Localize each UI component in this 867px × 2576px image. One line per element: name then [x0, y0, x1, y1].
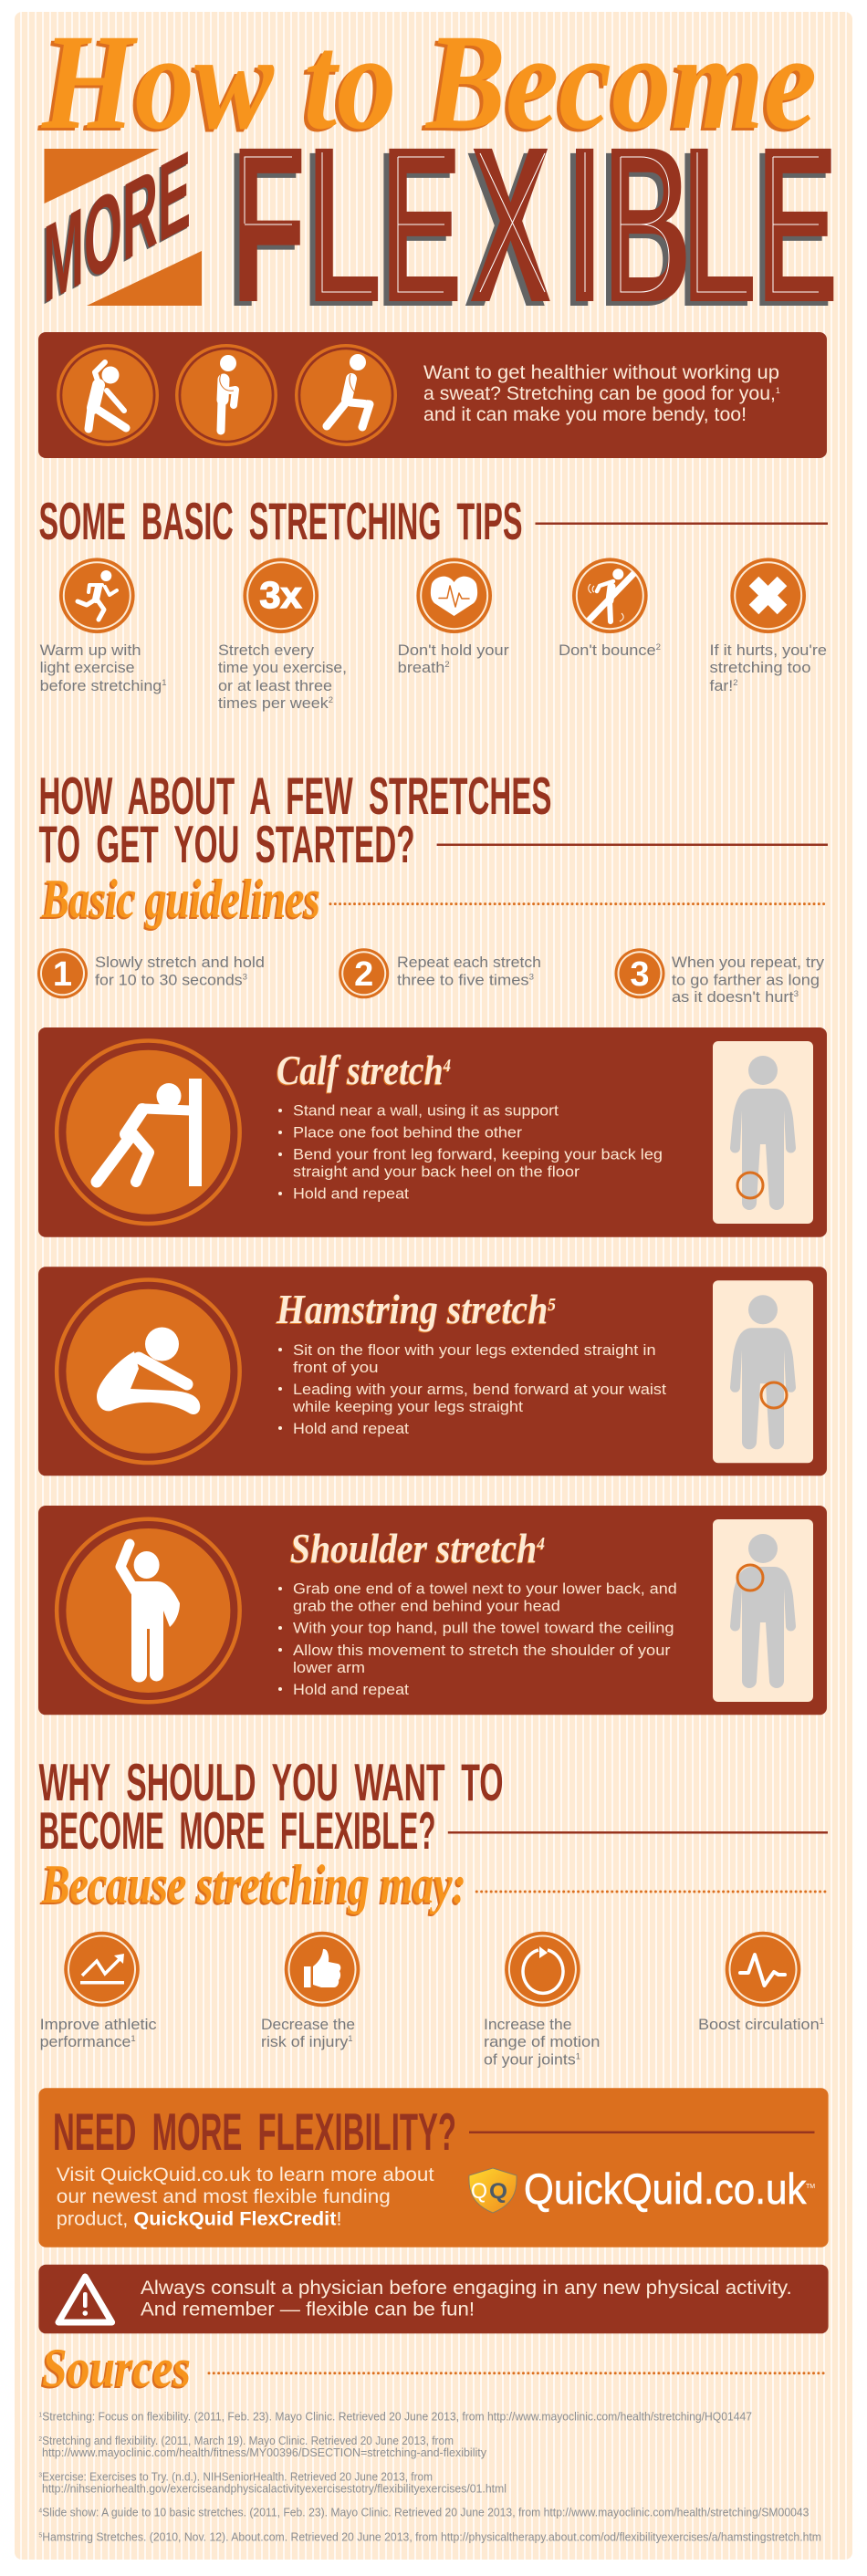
shoulder stretch steps: lower arm: [293, 1659, 365, 1676]
guideline 2: 2: [354, 955, 373, 994]
source list: [38, 2410, 821, 2543]
title: FLEXIBLE: FLEXIBLE: [232, 99, 839, 349]
calf stretch steps: straight and your back heel on the floor: [293, 1163, 580, 1181]
hamstring stretch steps: Sit on the floor with your legs extended straight in: [293, 1341, 656, 1359]
calf stretch steps: Hold and repeat: [293, 1184, 409, 1202]
source list: Stretching: Focus on flexibility. (2011, Feb. 23). Mayo Clinic. Retrieved 20 June 2013, from http://www.mayoclinic.com/health/stretching/HQ01447: [42, 2410, 752, 2423]
shoulder stretch steps: Allow this movement to stretch the shoulder of your: [293, 1642, 671, 1659]
tip: stretch three times: Stretch every: [218, 641, 315, 659]
call to action text: Visit QuickQuid.co.uk to learn more about: [57, 2164, 434, 2185]
source list: Slide show: A guide to 10 basic stretches. (2011, Feb. 23). Mayo Clinic. Retrieved 20 June 2013, from http://www.mayoclinic.com/health/stretching/SM00043: [42, 2507, 809, 2519]
tip: if it hurts: [710, 558, 827, 694]
icon: side bend stretch: [57, 344, 159, 446]
source list: http://www.mayoclinic.com/health/fitness/MY00396/DSECTION=stretching-and-flexibility: [42, 2446, 487, 2459]
benefit: range of motion: 1: [576, 2051, 580, 2060]
tip: breathing: [398, 558, 509, 676]
tip: stretch three times: time you exercise,: [218, 659, 347, 676]
shoulder stretch steps: [278, 1580, 677, 1698]
benefit: decrease injury: [261, 1932, 360, 2050]
benefit: boost circulation: 1: [820, 2017, 824, 2026]
tip: stretch three times: or at least three: [218, 677, 332, 694]
guideline 1: 1: [53, 955, 72, 994]
tip: stretch three times: 3x: [259, 574, 302, 616]
shoulder stretch title: Shoulder stretch: [290, 1525, 576, 1571]
shoulder stretch steps: grab the other end behind your head: [293, 1598, 560, 1615]
guideline 2: Repeat each stretch: [397, 954, 541, 971]
body diagram: hamstring highlighted: [713, 1280, 813, 1463]
title badge: MORE: [43, 127, 202, 328]
hamstring stretch steps: Leading with your arms, bend forward at your waist: [293, 1381, 666, 1398]
panel: need more flexibility call to action: [38, 2088, 829, 2247]
tip: don't bounce: [559, 558, 661, 659]
tip: if it hurts: If it hurts, you're: [710, 641, 827, 659]
call to action heading: NEED MORE FLEXIBILITY?: [53, 2103, 456, 2162]
benefit: athletic performance: [40, 1932, 157, 2050]
warning text: Always consult a physician before engaging in any new physical activity.: [141, 2278, 792, 2299]
heading: why should you want to become more flexible: [38, 1754, 828, 1861]
tip: if it hurts: 2: [733, 678, 737, 687]
source list: 4: [38, 2508, 42, 2515]
hamstring stretch steps: while keeping your legs straight: [292, 1398, 523, 1415]
shoulder stretch steps: Hold and repeat: [293, 1681, 409, 1698]
source list: Exercise: Exercises to Try. (n.d.). NIHSeniorHealth. Retrieved 20 June 2013, from: [42, 2471, 433, 2484]
tip: if it hurts: stretching too: [710, 659, 810, 676]
icon: warning triangle: [58, 2277, 112, 2322]
tip: warm up: before stretching: [40, 677, 155, 694]
tip: if it hurts: far!: [710, 677, 732, 694]
guideline 3: [615, 948, 825, 1006]
tip: warm up: 1: [162, 678, 167, 687]
logo: QuickQuid.co.uk: QuickQuid.co.uk: [524, 2164, 807, 2213]
benefit: range of motion: Increase the: [484, 2016, 571, 2033]
hamstring stretch steps: Hold and repeat: [293, 1420, 409, 1437]
body diagram: shoulder highlighted: [713, 1519, 813, 1702]
panel: calf stretch: [38, 1027, 827, 1237]
guideline 3: When you repeat, try: [672, 954, 825, 971]
heading: how about a few stretches: [38, 767, 828, 874]
icon: shoulder stretch figure: [55, 1517, 242, 1705]
panel: warning: [38, 2265, 829, 2333]
hamstring stretch title: 5: [548, 1295, 556, 1315]
icon: calf stretch figure: [55, 1038, 242, 1225]
shoulder stretch steps: Grab one end of a towel next to your lower back, and: [293, 1580, 677, 1598]
call to action text: our newest and most flexible funding: [57, 2186, 391, 2207]
heading: how about a few stretches: TO GET YOU STARTED?: [38, 816, 414, 874]
benefit: boost circulation: [698, 1932, 824, 2033]
benefit: athletic performance: performance: [40, 2033, 127, 2050]
tip: don't bounce: Don't bounce: [559, 641, 650, 659]
benefit: range of motion: of your joints: [484, 2050, 571, 2068]
panel: shoulder stretch: [38, 1506, 827, 1715]
subheading: because stretching may: Because stretching may:: [41, 1854, 466, 1914]
benefit: athletic performance: Improve athletic: [40, 2016, 157, 2033]
hamstring stretch steps: front of you: [293, 1359, 378, 1376]
tip: stretch three times: times per week: [218, 694, 322, 712]
guideline 3: to go farther as long: [672, 971, 820, 988]
warning text: And remember — flexible can be fun!: [141, 2299, 475, 2320]
source list: 2: [38, 2436, 42, 2443]
source list: Hamstring Stretches. (2010, Nov. 12). About.com. Retrieved 20 June 2013, from http://physicaltherapy.about.com/od/flexibilityexercises/a/hamstingstretch.htm: [42, 2530, 821, 2543]
logo: QuickQuid.co.uk: Q: [471, 2179, 487, 2204]
logo: QuickQuid.co.uk: TM: [806, 2184, 815, 2190]
tip: breathing: Don't hold your: [398, 641, 509, 659]
guideline 2: three to five times: [397, 971, 519, 988]
calf stretch steps: Bend your front leg forward, keeping your back leg: [293, 1146, 663, 1163]
icon: lunge stretch: [295, 344, 397, 446]
subheading: basic guidelines: Basic guidelines: [41, 869, 320, 929]
guideline 1: [37, 948, 265, 998]
icon: quad stretch: [175, 344, 277, 446]
intro text: Want to get healthier without working up: [423, 362, 779, 383]
hamstring stretch title: Hamstring stretch: [277, 1286, 590, 1332]
hamstring stretch steps: [278, 1341, 666, 1437]
intro text: and it can make you more bendy, too!: [423, 404, 747, 425]
tip: warm up: [40, 558, 167, 694]
benefit: range of motion: [484, 1932, 600, 2068]
benefit: decrease injury: risk of injury: [261, 2033, 344, 2050]
guideline 1: Slowly stretch and hold: [95, 954, 265, 971]
calf stretch steps: Stand near a wall, using it as support: [293, 1102, 559, 1120]
source list: 3: [38, 2473, 42, 2479]
calf stretch title: Calf stretch: [277, 1047, 478, 1093]
benefit: range of motion: range of motion: [484, 2033, 600, 2050]
tip: stretch three times: [218, 558, 347, 712]
benefit: boost circulation: Boost circulation: [698, 2016, 812, 2033]
subheading: sources: Sources: [42, 2338, 191, 2398]
benefit: athletic performance: 1: [131, 2034, 136, 2043]
heading: why should you want to become more flexible: WHY SHOULD YOU WANT TO: [38, 1754, 504, 1812]
calf stretch title: 4: [443, 1056, 451, 1076]
calf stretch steps: Place one foot behind the other: [293, 1124, 522, 1142]
intro text: a sweat? Stretching can be good for you,: [423, 383, 772, 404]
intro text: [423, 362, 780, 425]
tip: breathing: breath: [398, 659, 442, 676]
guideline 3: 3: [630, 955, 650, 994]
call to action text: [57, 2164, 434, 2229]
text: MORE: [43, 127, 191, 328]
guideline 2: 3: [529, 972, 534, 981]
call to action text: product, QuickQuid FlexCredit !: [57, 2208, 342, 2229]
guideline 2: [339, 948, 541, 998]
guideline 1: for 10 to 30 seconds: [95, 971, 235, 988]
source list: 1: [38, 2412, 42, 2418]
panel: hamstring stretch: [38, 1267, 827, 1476]
benefit: decrease injury: 1: [348, 2034, 353, 2043]
guideline 3: as it doesn't hurt: [672, 988, 785, 1006]
icon: hamstring stretch figure: [55, 1278, 242, 1465]
source list: Stretching and flexibility. (2011, March 19). Mayo Clinic. Retrieved 20 June 2013, from: [42, 2435, 454, 2447]
tip: don't bounce: 2: [656, 642, 661, 652]
source list: http://nihseniorhealth.gov/exerciseandphysicalactivityexercisestotry/flexibilityexercises/01.html: [42, 2483, 507, 2496]
tip: warm up: light exercise: [40, 659, 135, 676]
benefit: decrease injury: Decrease the: [261, 2016, 355, 2033]
calf stretch steps: [278, 1102, 663, 1202]
guideline 1: 3: [243, 972, 247, 981]
shoulder stretch title: 4: [537, 1534, 545, 1554]
source list: 5: [38, 2532, 42, 2539]
tip: breathing: 2: [444, 660, 450, 669]
warning text: [141, 2278, 792, 2320]
intro text: 1: [776, 386, 780, 395]
shoulder stretch steps: With your top hand, pull the towel toward the ceiling: [293, 1620, 674, 1637]
logo: QuickQuid.co.uk: Q: [489, 2179, 507, 2204]
body diagram: calf highlighted: [713, 1041, 813, 1224]
intro panel: [38, 332, 827, 458]
tip: stretch three times: 2: [329, 695, 333, 704]
heading: why should you want to become more flexible: BECOME MORE FLEXIBLE?: [38, 1802, 436, 1861]
tip: warm up: Warm up with: [40, 641, 141, 659]
guideline 3: 3: [794, 989, 799, 998]
